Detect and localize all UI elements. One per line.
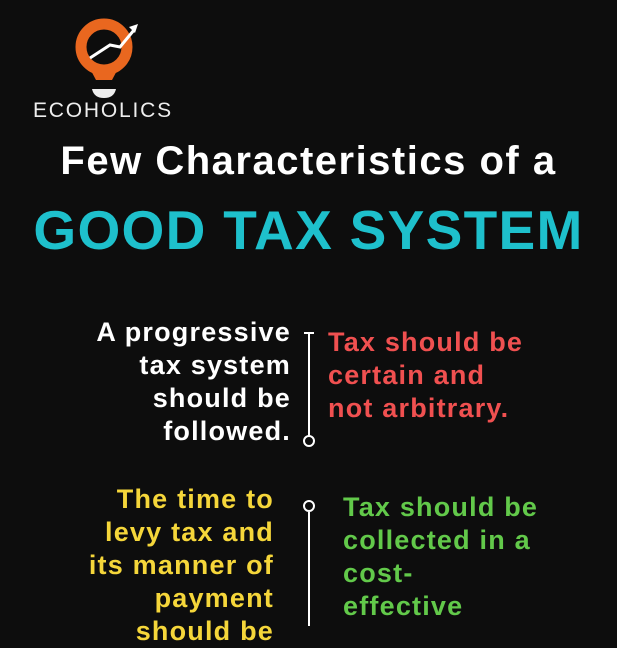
text: cost-effective: effective [343,591,463,621]
text: cost-effective [343,492,538,621]
text: progressive [96,317,291,446]
text: certain: Tax should be [328,327,523,357]
text: progressive: should be [153,383,291,413]
title: Few Characteristics of a [60,139,557,183]
text: progressive: tax system [139,350,291,380]
text: progressive: A progressive [96,317,291,347]
text: time to levy: The time to [117,484,274,514]
text: certain: not arbitrary. [328,393,509,423]
timeline line 2 [303,500,315,626]
text: certain [328,327,523,423]
text: time to levy: levy tax and [105,517,274,547]
text: cost-effective: cost- [343,558,414,588]
icon: lightbulb [81,24,138,98]
brand name: ECOHOLICS [33,99,173,122]
text: time to levy: payment [155,583,274,613]
text: cost-effective: Tax should be [343,492,538,522]
text: time to levy [89,484,274,646]
text: time to levy: its manner of [89,550,274,580]
text: time to levy: should be [136,616,274,646]
heading: GOOD TAX SYSTEM [33,199,584,261]
text: certain: certain and [328,360,485,390]
logo [33,18,173,122]
timeline line 1 [303,332,315,447]
text: progressive: followed. [163,416,291,446]
text: cost-effective: collected in a [343,525,531,555]
